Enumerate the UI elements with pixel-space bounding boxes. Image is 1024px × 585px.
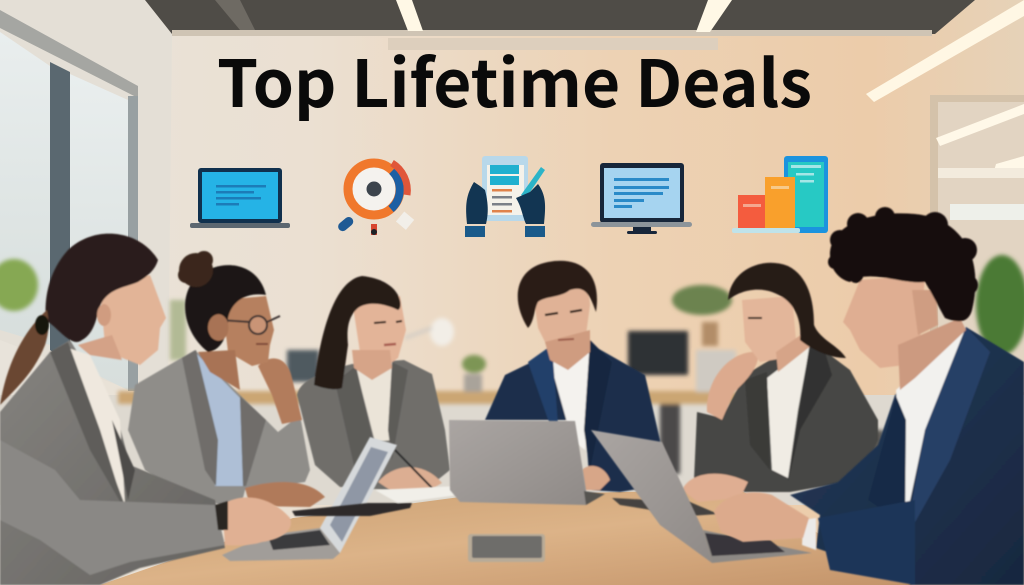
icon: stacked bars and tablet	[732, 156, 828, 233]
laptop: left woman	[222, 437, 397, 561]
icon: desktop monitor	[591, 163, 692, 234]
icon: laptop	[190, 168, 290, 228]
person: woman in dark grey blazer, long hair	[297, 276, 450, 490]
icon: target with magnifier	[336, 163, 414, 235]
laptop: right	[591, 430, 812, 563]
papers and notebooks on table	[292, 486, 718, 562]
background office furniture and plants	[0, 255, 1024, 480]
table	[100, 490, 912, 585]
person: woman in beige blazer, far left	[0, 234, 291, 585]
icon: hands holding document	[465, 156, 545, 237]
person: man in navy suit, centre	[485, 261, 662, 492]
person: man in navy suit, foreground right	[714, 207, 1024, 585]
laptop: centre	[449, 420, 605, 505]
person: woman with curly bun and glasses	[128, 251, 325, 510]
person: woman in charcoal blazer, chin on hand	[682, 263, 878, 502]
title: Top Lifetime Deals	[217, 32, 812, 126]
